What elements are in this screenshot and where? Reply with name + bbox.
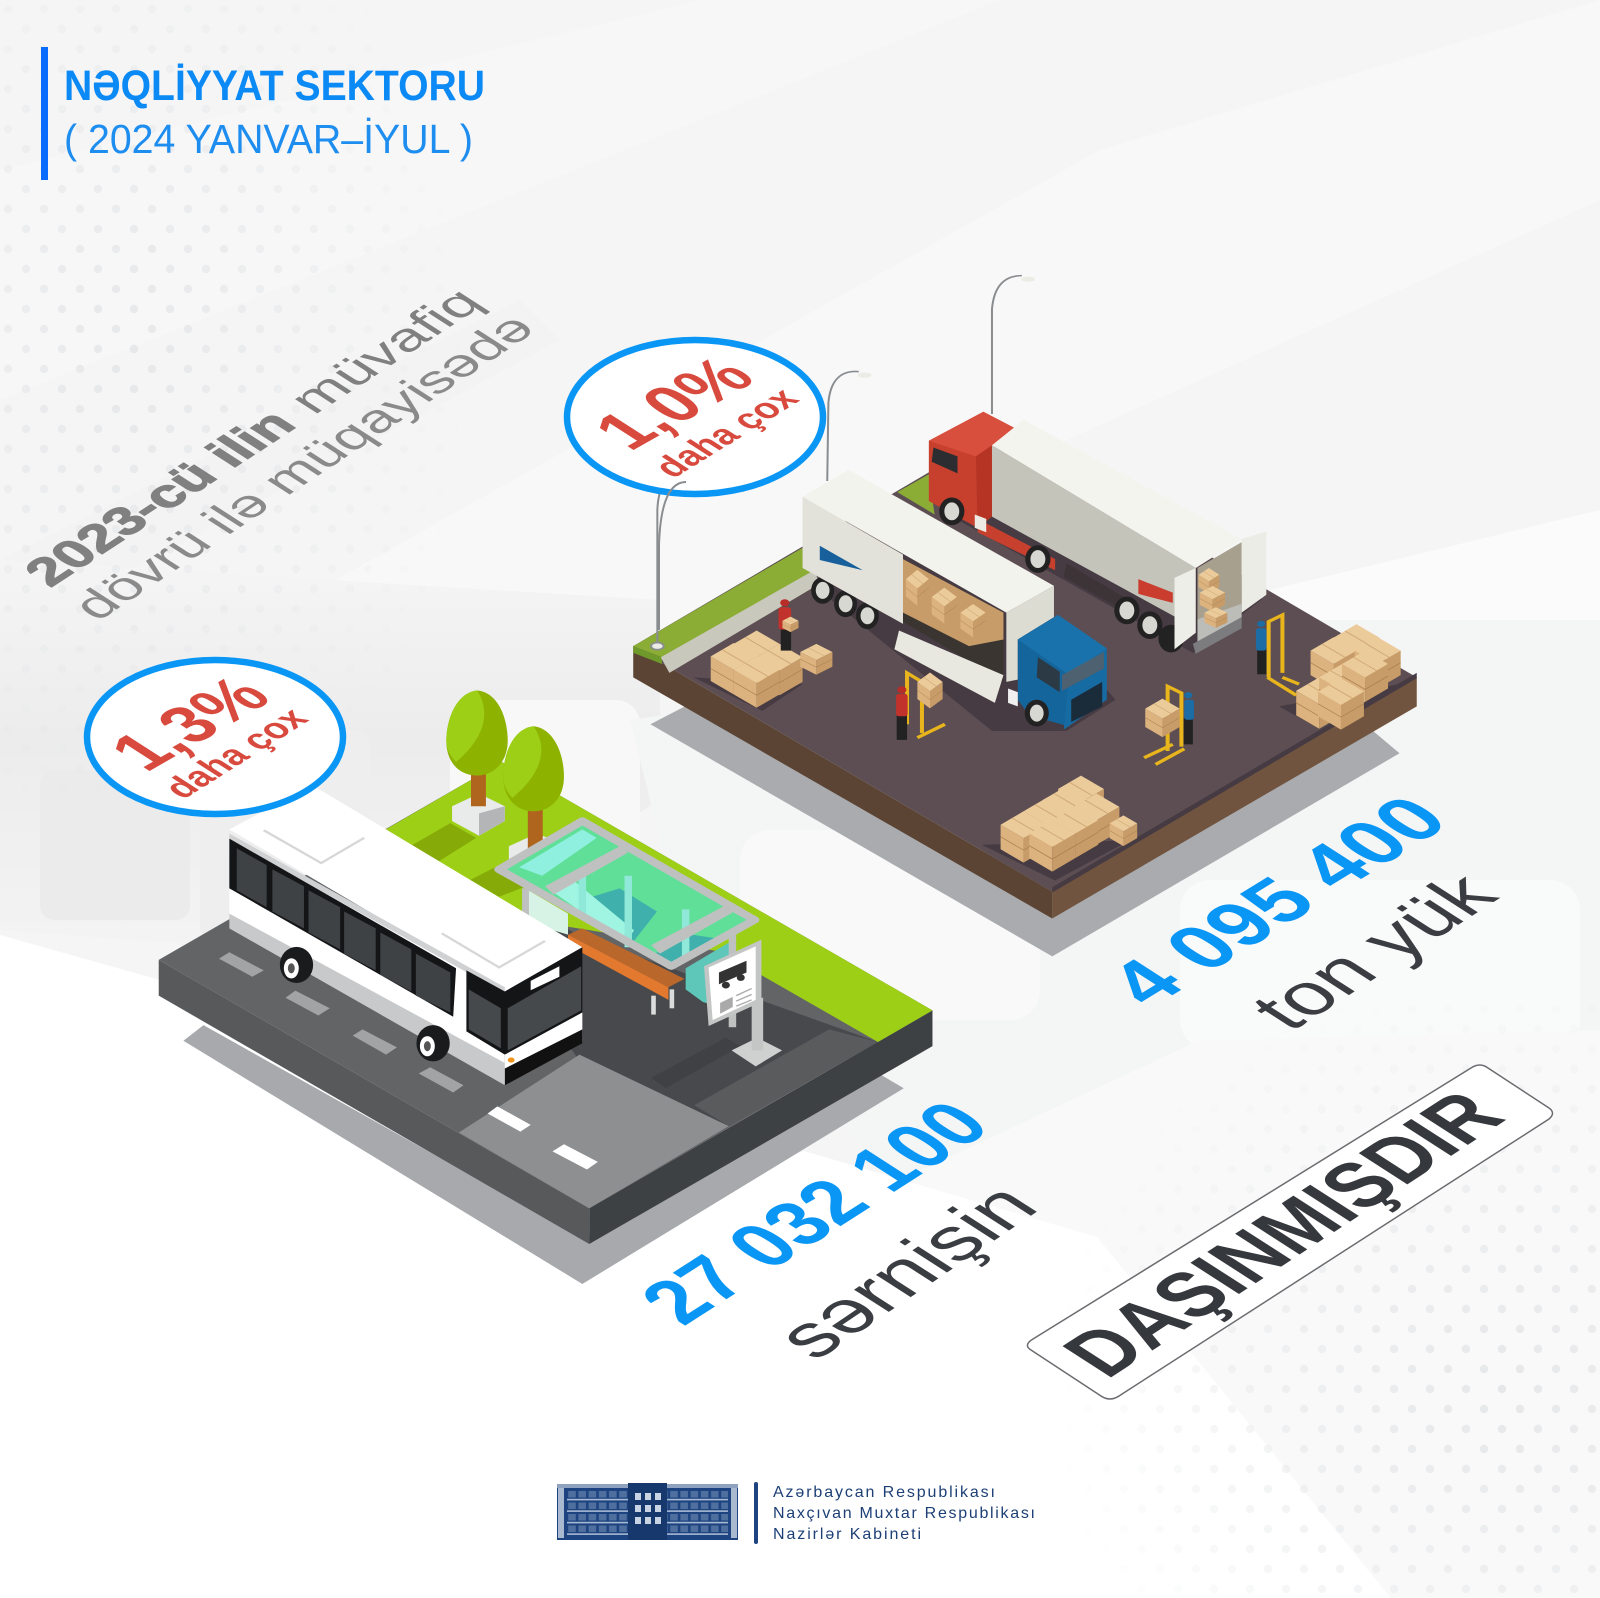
header accent bar xyxy=(41,47,48,180)
footer logo: Azərbaycan Respublikası xyxy=(773,1484,995,1501)
callout: bus growth: daha çox xyxy=(155,702,317,805)
cargo pallet front xyxy=(982,776,1137,880)
callout: freight growth xyxy=(567,340,823,630)
worker with blue forklift centre xyxy=(1144,686,1194,764)
red truck xyxy=(929,412,1266,654)
yard platform xyxy=(633,432,1417,918)
road platform xyxy=(159,762,932,1244)
comparison note xyxy=(12,280,547,628)
comparison note: 2023-cü ilin xyxy=(12,402,307,594)
freight yard scene xyxy=(633,276,1417,956)
freight figure: 4 095 400 xyxy=(1089,784,1467,1019)
callout: bus growth: 1,3% xyxy=(93,666,286,781)
worker with red forklift xyxy=(896,672,945,740)
comparison note: müvafiq xyxy=(276,280,494,422)
street lamps xyxy=(651,276,1035,650)
title: NƏQLİYYAT SEKTORU xyxy=(64,62,485,110)
stop shadow xyxy=(183,1025,904,1284)
freight label: ton yük xyxy=(1233,860,1515,1042)
callout: freight growth: 1,0% xyxy=(577,346,771,460)
worker with box xyxy=(778,599,799,651)
bus stop scene xyxy=(159,691,932,1284)
subtitle: ( 2024 YANVAR–İYUL ) xyxy=(64,116,473,162)
icon: government building xyxy=(557,1483,738,1540)
grass strip xyxy=(384,762,932,1042)
transported badge: DAŞINMIŞDIR xyxy=(1043,1078,1523,1390)
footer logo: Naxçıvan Muxtar Respublikası xyxy=(773,1505,1035,1522)
footer logo xyxy=(557,1482,1035,1544)
passenger label: sərnişin xyxy=(755,1170,1055,1371)
yard shadow xyxy=(650,706,1400,956)
cargo pallet right xyxy=(1279,624,1401,730)
bus xyxy=(229,785,582,1085)
comparison note: dövrü ilə müqayisədə xyxy=(60,306,547,628)
bus shelter xyxy=(499,821,755,1027)
cargo pallet front left xyxy=(694,631,832,711)
passenger figure: 27 032 100 xyxy=(622,1089,1009,1337)
worker with blue forklift right xyxy=(1256,615,1299,695)
callout: freight growth: daha çox xyxy=(645,382,808,484)
road markings xyxy=(219,952,598,1169)
callout: bus growth xyxy=(87,660,343,814)
footer logo: Nazirlər Kabineti xyxy=(773,1526,921,1543)
blue truck xyxy=(803,470,1115,731)
trees xyxy=(446,691,564,874)
stop sign xyxy=(704,940,782,1066)
